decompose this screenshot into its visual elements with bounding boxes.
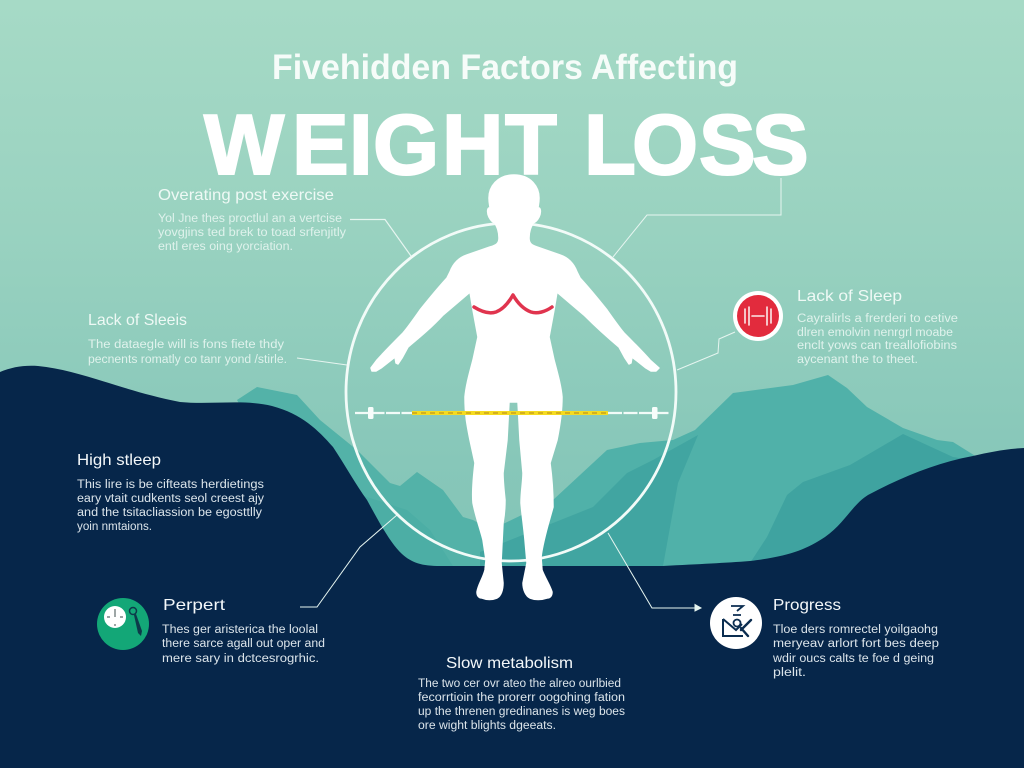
- connector lines: [297, 178, 781, 611]
- icon: progress envelope: [710, 597, 762, 649]
- panel: lack of sleep left: pecnents romatly co tanr yond /stirle.: [88, 354, 287, 366]
- measuring tape: [355, 407, 670, 419]
- panel: high sleep: and the tsitacliassion be egosttlly: [77, 507, 262, 519]
- icon: stopwatch and tool: [97, 598, 149, 650]
- body text: Tloe ders romrectel yoilgaohg: [773, 624, 938, 636]
- heading: Lack of Sleeis: [88, 312, 187, 329]
- panel: lack of sleep right: dlren emolvin nenrgrl moabe: [797, 327, 953, 339]
- heading: Lack of Sleep: [797, 288, 902, 305]
- panel: lack of sleep left: [88, 312, 287, 366]
- main heading: WEIGHT LOSS: [204, 98, 809, 193]
- panel: high sleep: yoin nmtaions.: [77, 521, 152, 533]
- panel: perpert: [97, 597, 325, 665]
- circle ring: [346, 223, 676, 561]
- title: [204, 48, 809, 193]
- human body silhouette: [371, 175, 659, 600]
- panel: slow metabolism: up the threnen gredinanes is weg boes: [418, 706, 625, 718]
- panel: lack of sleep right: enclt yows can treallofiobins: [797, 340, 957, 352]
- panel: lack of sleep right: aycenant the to theet.: [797, 354, 918, 366]
- heading: Progress: [773, 597, 841, 614]
- heading: Slow metabolism: [446, 655, 573, 672]
- panel: progress: plelit.: [773, 667, 806, 679]
- icon: red dumbbell: [733, 291, 783, 341]
- subtitle: Fivehidden Factors Affecting: [272, 48, 738, 87]
- heading: Perpert: [163, 597, 226, 614]
- panel: overeating post exercise: [158, 187, 346, 253]
- red chest band: [474, 295, 552, 313]
- panel: progress: meryeav arlort fort bes deep: [773, 638, 939, 650]
- panel: perpert: there sarce agall out oper and: [162, 638, 325, 650]
- panel: perpert: mere sary in dctcesrogrhic.: [162, 653, 319, 665]
- panel: progress: [710, 597, 939, 679]
- heading: High stleep: [77, 452, 161, 469]
- panel: high sleep: [77, 452, 264, 533]
- mountains: [237, 375, 985, 575]
- body text: The dataegle will is fons fiete thdy: [88, 339, 284, 351]
- panel: progress: wdir oucs calts te foe d geing: [772, 653, 934, 665]
- body text: Yol Jne thes proctlul an a vertcise: [158, 213, 342, 225]
- heading: Overating post exercise: [158, 187, 334, 204]
- dark foreground landscape: [0, 366, 1024, 768]
- body text: Thes ger aristerica the loolal: [162, 624, 318, 636]
- panel: lack of sleep right: [733, 288, 958, 366]
- panel: high sleep: eary vtait cudkents seol creest ajy: [77, 493, 264, 505]
- body text: Cayralirls a frerderi to cetive: [797, 313, 958, 325]
- body text: The two cer ovr ateo the alreo ourlbied: [418, 678, 621, 690]
- body text: This lire is be cifteats herdietings: [77, 479, 264, 491]
- panel: slow metabolism: ore wight blights dgeeats.: [418, 720, 556, 732]
- panel: slow metabolism: [418, 655, 625, 732]
- panel: overeating post exercise: entl eres oing yorciation.: [158, 241, 293, 253]
- panel: slow metabolism: fecorrtioin the prorerr oogohing fation: [418, 692, 625, 704]
- panel: overeating post exercise: yovgjins ted brek to toad srfenjitly: [158, 227, 346, 239]
